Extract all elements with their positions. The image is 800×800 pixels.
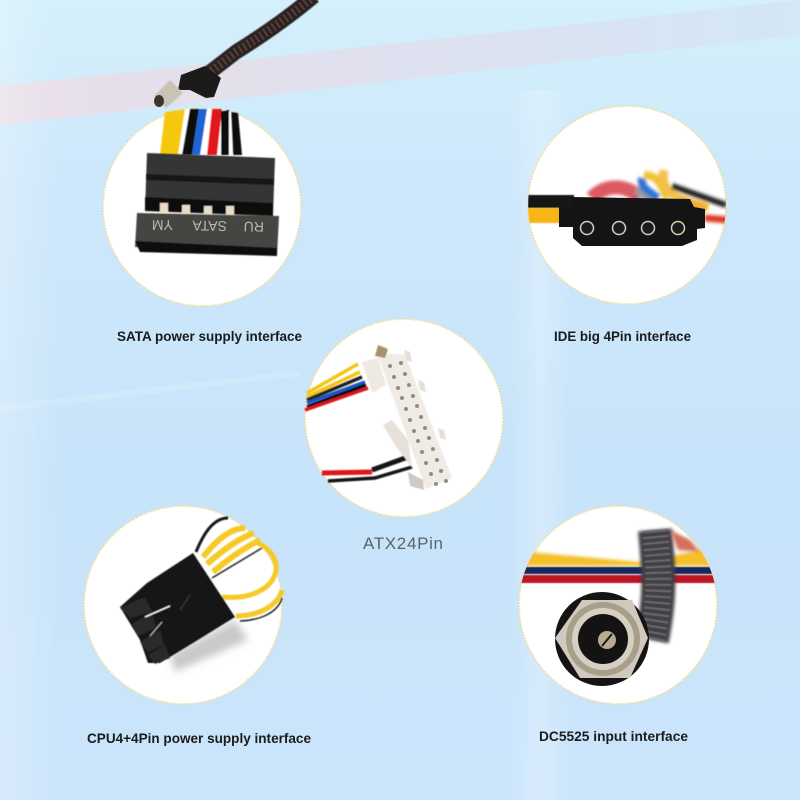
panel: CPU4+4Pin power supply interface [84,506,311,746]
SATA connector markings: SATA [192,218,227,234]
IDE connector [559,197,705,246]
CPU wires [196,518,282,621]
sleeved DC cable [154,0,314,108]
SATA connector markings: RU [244,219,264,235]
ATX label: ATX24Pin [363,534,443,553]
DC blurred coloured wires [510,530,720,640]
photo circle: SATA [103,108,301,306]
CPU label: CPU4+4Pin power supply interface [87,730,311,746]
DC label: DC5525 input interface [539,728,688,744]
SATA label: SATA power supply interface [117,328,302,344]
IDE label: IDE big 4Pin interface [554,328,691,344]
IDE blurred wires [528,170,728,223]
ATX pin holes [388,361,448,486]
panel: DC5525 input interface [510,506,720,744]
SATA connector [135,153,279,256]
DC braided sleeve [652,530,658,640]
panel: IDE big 4Pin interface [528,106,728,344]
CPU shadow [170,620,248,672]
ATX lower wires [322,457,412,481]
CPU connector [120,553,235,664]
photo circle: DC [519,506,717,704]
panel: SATA power supply interface [103,108,302,344]
SATA wires [160,109,242,155]
photo circle: IDE [528,106,726,304]
SATA connector markings: YM [152,217,173,233]
IDE left wires [528,195,574,208]
ATX 24-pin connector [362,345,452,490]
ATX upper wires [305,364,368,410]
DC5525 jack [555,592,649,686]
photo circle: CPU [84,506,282,704]
panel: ATX24Pin [305,319,503,553]
photo circle: ATX [305,319,503,517]
